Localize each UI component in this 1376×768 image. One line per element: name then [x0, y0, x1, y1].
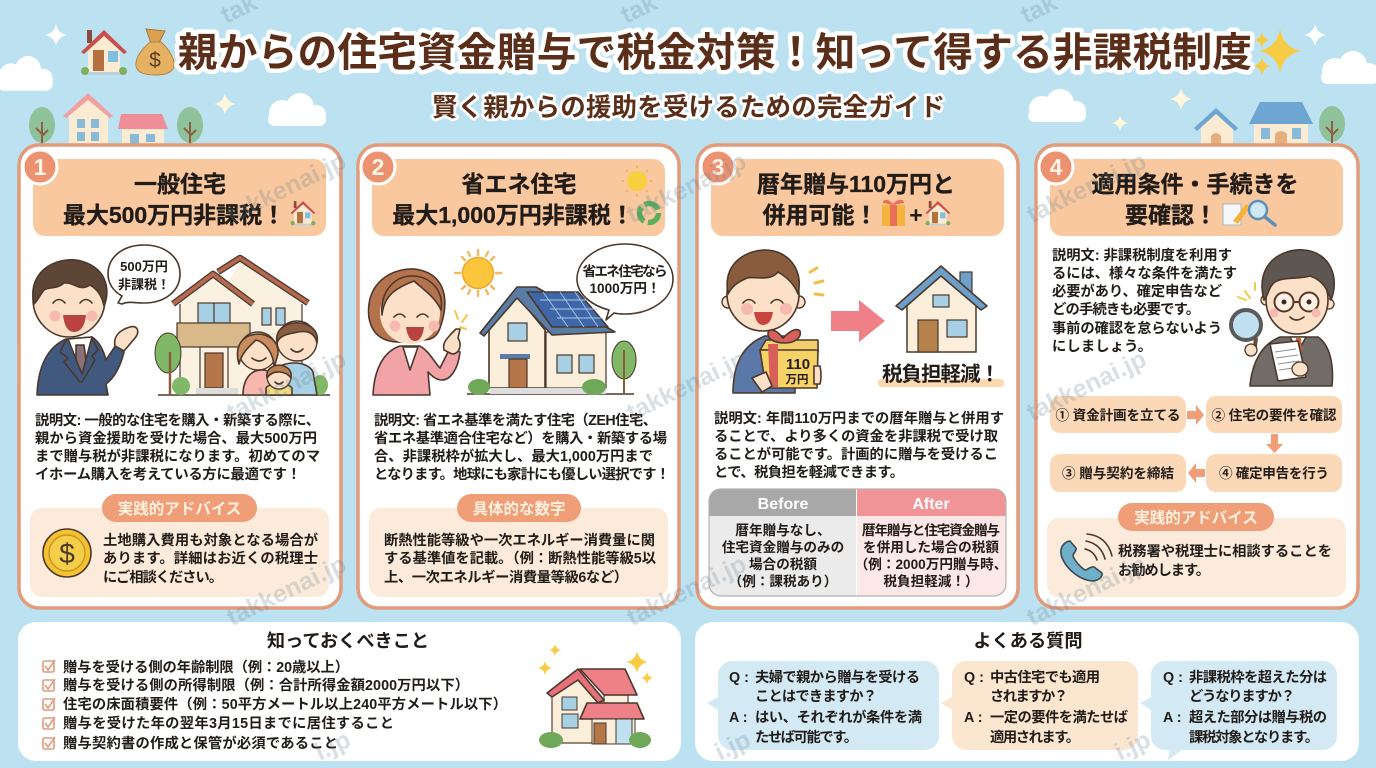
speech bubble: 省エネ住宅なら1000万円: 省エネ住宅なら — [582, 263, 668, 279]
description text: どの手続きも必要です。 — [1052, 300, 1200, 318]
illustration: sun — [455, 250, 501, 296]
card 4 header: 要確認！ — [1125, 202, 1217, 228]
illustration: boy holding gift — [722, 250, 823, 393]
advice pill: 実践的アドバイス — [118, 500, 241, 518]
question bubble 1: 夫婦で親から贈与を受ける — [755, 668, 920, 686]
description text — [714, 409, 1004, 481]
tax reduced label: 税負担軽減！ — [882, 362, 1000, 386]
watermark: takkenai.jp — [622, 147, 751, 229]
question bubble 1: たせば可能です。 — [755, 728, 858, 746]
icon: gold coin: $ — [59, 538, 75, 569]
advice box: 土地購入費用も対象となる場合が — [103, 531, 318, 549]
watermark: takkenai.jp — [222, 147, 351, 229]
step 1 — [1050, 396, 1186, 433]
arrow left — [1188, 463, 1205, 483]
question bubble 3: A : — [1163, 710, 1182, 726]
panel: card 2 energy saving housing — [358, 145, 679, 608]
description text: 説明文: 年間110万円までの暦年贈与と併用す — [714, 409, 1004, 427]
after column — [855, 489, 1007, 596]
question bubble 3: どうなりますか？ — [1189, 688, 1295, 705]
question bubble 3: Q : — [1163, 670, 1183, 686]
card 4 header — [1050, 159, 1343, 236]
illustration: advisor man — [33, 260, 138, 395]
before and after table — [709, 489, 1007, 596]
card 4 number badge: 4 — [1050, 154, 1063, 180]
arrow right — [1187, 405, 1204, 425]
speech bubble: 500万円 非課税 — [108, 245, 180, 304]
illustration: solar house — [467, 287, 636, 395]
checklist: 贈与を受ける側の年齢制限（例：20歳以上） — [63, 658, 349, 676]
checklist: 贈与契約書の作成と保管が必須であること — [63, 734, 338, 752]
advice pill — [1118, 503, 1274, 531]
question bubble 2 — [941, 661, 1138, 750]
description text: 説明文: 省エネ基準を満たす住宅（ZEH住宅、 — [374, 411, 657, 429]
before column: （例：課税あり） — [729, 573, 837, 589]
description text: にしましょう。 — [1052, 338, 1152, 355]
title icon: house — [81, 30, 127, 75]
title: 親からの住宅資金贈与で税金対策！知って得する非課税制度 — [178, 31, 1252, 75]
description text: ることで、より多くの資金を非課税で受け取 — [714, 427, 999, 445]
illustration: smiling woman — [369, 269, 467, 395]
card 4 number badge — [1039, 150, 1073, 184]
description text: とで、税負担を軽減できます。 — [714, 463, 904, 481]
panel: things to know — [18, 622, 681, 761]
illustration: boy holding gift: 万円 — [786, 373, 808, 386]
question bubble 3 — [1140, 661, 1337, 760]
question bubble 3: 課税対象となります。 — [1189, 728, 1319, 746]
before column — [709, 489, 856, 596]
card 2 header: 省エネ住宅 — [462, 171, 576, 197]
question bubble 2: されますか？ — [990, 688, 1068, 705]
numbers box: 断熱性能等級や一次エネルギー消費量に関 — [384, 531, 655, 549]
panel: card 3 annual gift — [697, 145, 1018, 608]
arrow down — [1266, 434, 1283, 453]
card 2 number badge: 2 — [372, 154, 384, 180]
advice box — [30, 494, 329, 597]
question bubble 2: A : — [964, 710, 983, 726]
description text: ることが可能です。計画的に贈与を受けるこ — [714, 445, 998, 463]
before column: 暦年贈与なし、 — [735, 522, 831, 538]
speech bubble: 500万円 非課税: 非課税！ — [118, 277, 170, 292]
numbers pill: 具体的な数字 — [472, 500, 566, 518]
question bubble 2: 適用されます。 — [990, 728, 1080, 746]
watermark: takkenai.jp — [622, 550, 751, 632]
card 2 header — [372, 159, 665, 236]
speech bubble: 省エネ住宅なら1000万円: 1000万円！ — [589, 281, 661, 296]
icon: house with sparkles — [538, 644, 653, 748]
speech bubble: 500万円 非課税: 500万円 — [120, 259, 168, 274]
description text — [35, 411, 320, 483]
step flow — [1050, 396, 1342, 492]
numbers box: 上、一次エネルギー消費量等級6など） — [384, 568, 628, 586]
watermark: takkenai.jp — [1022, 345, 1151, 427]
icon: left houses and trees — [29, 93, 203, 144]
after column: 暦年贈与と住宅資金贈与 — [862, 522, 1000, 538]
step 4 — [1206, 454, 1342, 492]
question bubble 1: はい、それぞれが条件を満 — [755, 708, 922, 726]
step 3: ③ 贈与契約を締結 — [1062, 465, 1174, 481]
advice box: お勧めします。 — [1118, 562, 1210, 579]
step 1: ① 資金計画を立てる — [1056, 407, 1180, 423]
numbers box: する基準値を記載。（例：断熱性能等級5以 — [384, 549, 657, 567]
icon: gold coin — [43, 529, 91, 577]
before column: Before — [758, 496, 808, 513]
numbers pill — [457, 494, 581, 522]
card 3 number badge — [701, 150, 735, 184]
card 3 number badge: 3 — [712, 154, 724, 180]
card 1 header: 最大500万円非課税！ — [63, 202, 285, 228]
watermark: takkenai.jp — [222, 550, 351, 632]
question bubble 3: 非課税枠を超えた分は — [1189, 668, 1327, 686]
icon: right houses and tree — [1194, 102, 1345, 144]
question bubble 1: A : — [729, 710, 748, 726]
watermark: i.jp — [710, 725, 755, 766]
description text: 事前の確認を怠らないよう — [1052, 319, 1222, 337]
question bubble 2: 中古住宅でも適用 — [990, 668, 1100, 686]
panel: card 1 general housing — [19, 145, 341, 608]
checklist: 贈与を受けた年の翌年3月15日までに居住すること — [63, 714, 394, 732]
after column: 税負担軽減！） — [883, 573, 979, 589]
advice box: あります。詳細はお近くの税理士 — [103, 549, 318, 567]
description text: 親から資金援助を受けた場合、最大500万円 — [35, 429, 317, 447]
description text: まで贈与税が非課税になります。初めてのマ — [35, 447, 320, 465]
watermark: takkenai.jp — [1022, 147, 1151, 229]
watermark: i.jp — [310, 725, 355, 766]
title icon: money bag: $ — [149, 49, 161, 72]
description text: 説明文: 一般的な住宅を購入・新築する際に、 — [35, 411, 320, 429]
speech bubble: 省エネ住宅なら1000万円 — [577, 244, 673, 320]
before column: 住宅資金贈与のみの — [722, 539, 844, 555]
illustration: inspector man with magnifier — [1231, 250, 1334, 386]
sky decoration: left clouds and sparkles — [0, 24, 326, 126]
numbers box — [369, 494, 668, 597]
watermark — [216, 0, 1155, 766]
checklist: 住宅の床面積要件（例：50平方メートル以上240平方メートル以下） — [63, 695, 507, 713]
description text: 説明文: 非課税制度を利用す — [1052, 246, 1232, 264]
description text: 必要があり、確定申告など — [1052, 282, 1223, 300]
card 1 number badge — [23, 150, 57, 184]
description text: となります。地球にも家計にも優しい選択です！ — [374, 466, 670, 483]
advice box: にご相談ください。 — [103, 568, 223, 586]
illustration: family — [237, 321, 317, 395]
step 2 — [1206, 396, 1342, 433]
card 3 header — [711, 159, 1004, 236]
illustration: two-storey house — [155, 258, 330, 395]
card 1 number badge: 1 — [34, 154, 47, 180]
advice box — [1047, 503, 1346, 597]
illustration: blue roof house — [896, 266, 987, 352]
question bubble 3: 超えた部分は贈与税の — [1189, 708, 1327, 726]
icon: telephone — [1061, 534, 1112, 581]
step 2: ② 住宅の要件を確認 — [1212, 407, 1337, 423]
before column: 場合の税額 — [749, 556, 817, 572]
after column: （例：2000万円贈与時、 — [855, 556, 1007, 572]
checklist: 贈与を受ける側の所得制限（例：合計所得金額2000万円以下） — [63, 676, 469, 694]
advice pill — [102, 494, 257, 522]
card 3 header: + — [909, 202, 923, 228]
card 1 header: 一般住宅 — [134, 171, 226, 197]
after column: After — [912, 496, 950, 513]
after column: を併用した場合の税額 — [863, 539, 999, 555]
heading: 知っておくべきこと — [267, 631, 429, 651]
description text: イホーム購入を考えている方に最適です！ — [35, 465, 301, 483]
title icon: money bag — [136, 29, 174, 75]
illustration: boy holding gift: 110 — [786, 356, 810, 373]
description text: 省エネ基準適合住宅など）を購入・新築する場 — [374, 429, 667, 447]
heading: よくある質問 — [973, 631, 1083, 651]
advice pill: 実践的アドバイス — [1134, 509, 1258, 527]
watermark: takkenai.jp — [622, 345, 751, 427]
step 4: ④ 確定申告を行う — [1219, 465, 1329, 481]
description text — [1052, 246, 1237, 355]
advice box: 税務署や税理士に相談することを — [1118, 542, 1332, 560]
description text: るには、様々な条件を満たす — [1052, 265, 1237, 282]
question bubble 1: ことはできますか？ — [755, 688, 877, 705]
card 4 header: 適用条件・手続きを — [1092, 171, 1298, 197]
question bubble 2: 一定の要件を満たせば — [990, 709, 1129, 726]
card 2 header: 最大1,000万円非課税！ — [392, 202, 634, 228]
sky decoration: right clouds and sparkles — [1028, 24, 1376, 131]
step 3 — [1050, 454, 1186, 492]
watermark: i.jp — [1110, 725, 1155, 766]
question bubble 1 — [707, 661, 939, 750]
card 1 header — [33, 159, 326, 236]
card 3 header: 暦年贈与110万円と — [757, 171, 955, 197]
checklist — [43, 658, 507, 752]
card 2 number badge — [361, 150, 395, 184]
watermark: takkenai.jp — [1022, 550, 1151, 632]
question bubble 1: Q : — [729, 670, 749, 686]
subtitle: 賢く親からの援助を受けるための完全ガイド — [432, 94, 945, 122]
card 3 header: 併用可能！ — [762, 202, 878, 228]
watermark: takkenai.jp — [222, 345, 351, 427]
description text — [374, 411, 670, 483]
panel: card 4 conditions and procedures — [1036, 145, 1358, 608]
description text: 合、非課税枠が拡大し、最大1,000万円まで — [374, 447, 653, 465]
arrow — [831, 300, 885, 342]
question bubble 2: Q : — [964, 670, 984, 686]
title icon: sparkles — [1253, 29, 1301, 75]
panel: FAQ — [695, 622, 1359, 761]
